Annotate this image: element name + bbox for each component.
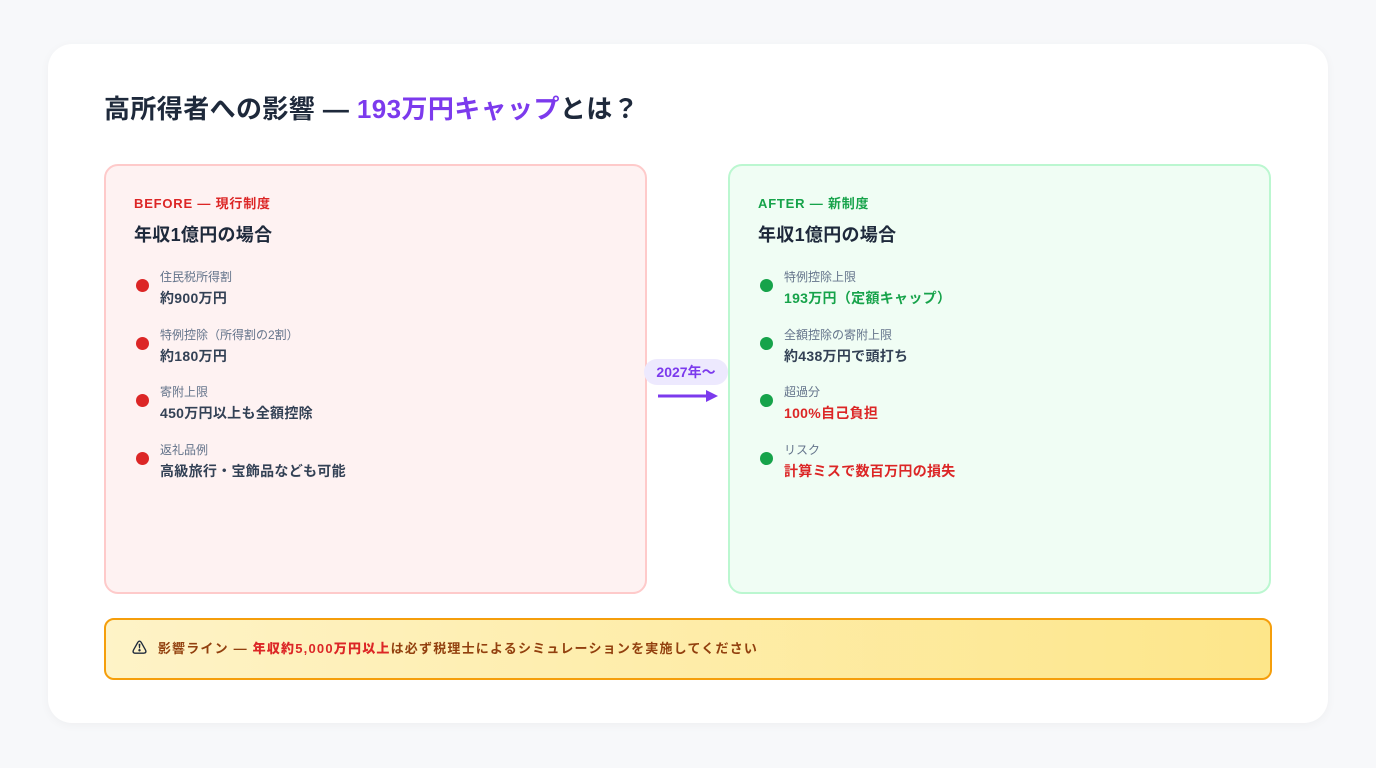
footer callout: ⚠ 影響ライン — 年収約5,000万円以上は必ず税理士によるシミュレーションを実施してください xyxy=(132,640,758,657)
tag: before: BEFORE — 現行制度 xyxy=(134,196,271,211)
item: full deduction limit: 全額控除の寄附上限 xyxy=(784,328,892,342)
heading: after: 年収1億円の場合 xyxy=(758,225,896,245)
item: excess: 超過分 xyxy=(784,385,820,399)
panel: after xyxy=(728,164,1271,594)
item: cap: 特例控除上限 xyxy=(784,270,856,284)
item: special deduction: 特例控除（所得割の2割） xyxy=(160,328,299,342)
item: residence tax: 住民税所得割 xyxy=(160,270,232,284)
footer callout xyxy=(104,618,1272,680)
item: risk: リスク xyxy=(784,443,820,457)
item: excess xyxy=(760,385,878,421)
pill: 2027 xyxy=(644,359,728,385)
item: residence tax: 約900万円 xyxy=(160,290,227,306)
tag: after: AFTER — 新制度 xyxy=(758,196,869,211)
item: full deduction limit xyxy=(760,328,908,364)
item: risk: 計算ミスで数百万円の損失 xyxy=(784,463,956,479)
item: excess: 100%自己負担 xyxy=(784,405,878,421)
item: donation limit: 寄附上限 xyxy=(160,385,208,399)
item: gifts: 高級旅行・宝飾品なども可能 xyxy=(160,463,346,479)
item: donation limit: 450万円以上も全額控除 xyxy=(160,405,313,421)
title: 高所得者への影響 — 193万円キャップとは？ xyxy=(104,94,639,124)
item: cap xyxy=(760,270,951,306)
item: cap: 193万円（定額キャップ） xyxy=(784,290,951,306)
item: gifts xyxy=(136,443,346,479)
item: special deduction xyxy=(136,328,299,364)
arrow xyxy=(658,390,718,402)
item: special deduction: 約180万円 xyxy=(160,348,227,364)
item: risk xyxy=(760,443,956,479)
panel: before xyxy=(104,164,647,594)
heading: before: 年収1億円の場合 xyxy=(134,225,272,245)
item: full deduction limit: 約438万円で頭打ち xyxy=(784,348,908,364)
pill: 2027: 2027年〜 xyxy=(656,364,716,380)
item: donation limit xyxy=(136,385,313,421)
item: gifts: 返礼品例 xyxy=(160,443,208,457)
item: residence tax xyxy=(136,270,232,306)
